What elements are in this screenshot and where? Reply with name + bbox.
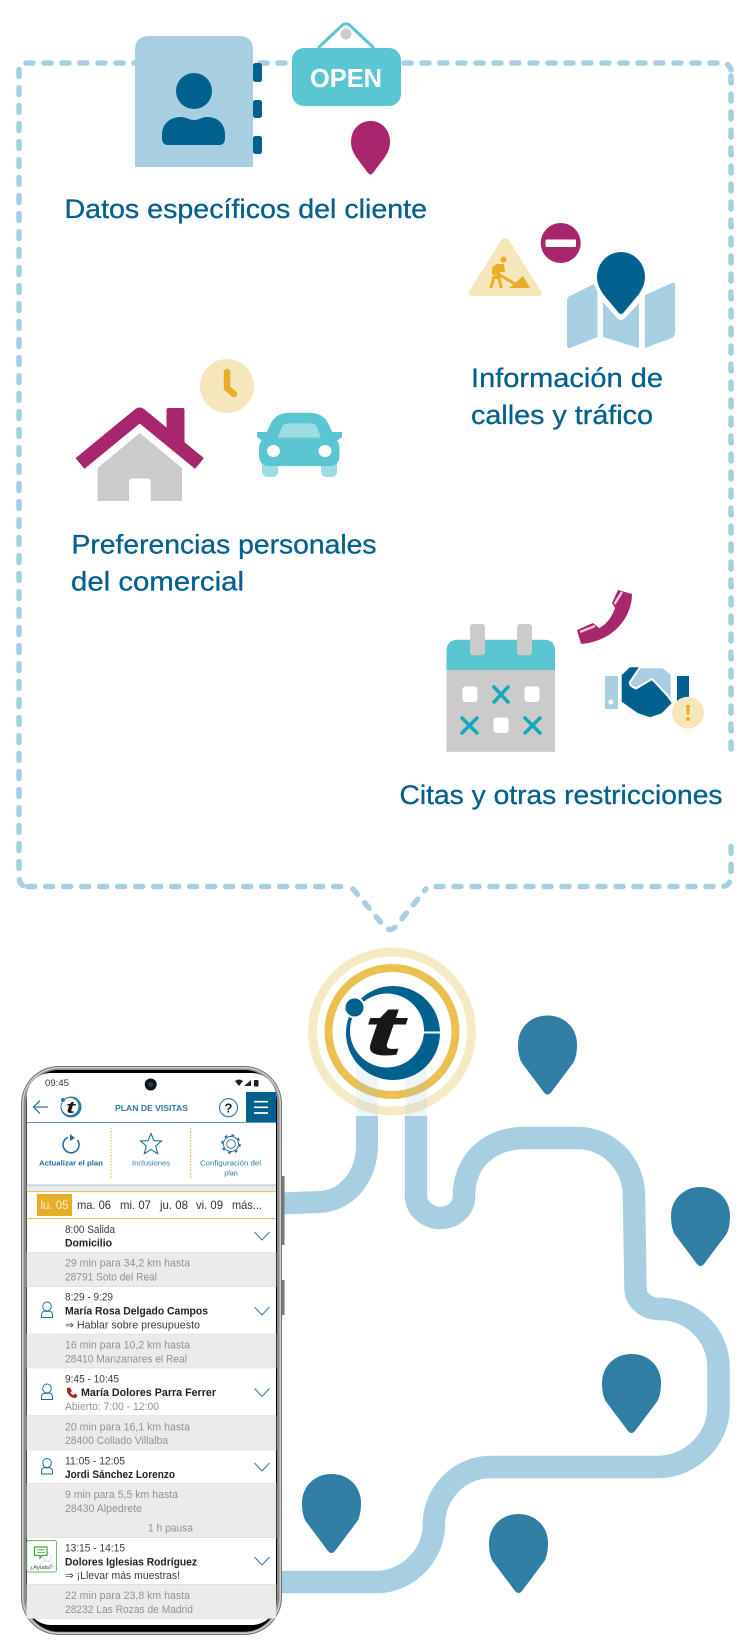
- toolbar: Actualizar el plan: [39, 1159, 103, 1168]
- heading: sales rep preferences: Preferencias personales: [72, 530, 376, 560]
- travel text 2: 28410 Manzanares el Real: [65, 1353, 187, 1365]
- heading: customer data: Datos específicos del cliente: [64, 194, 427, 224]
- toolbar: plan: [224, 1169, 238, 1178]
- travel text 2: [65, 1340, 191, 1365]
- row: departure: [65, 1224, 270, 1250]
- row: visit 2: [42, 1374, 270, 1413]
- travel text 3: [65, 1421, 191, 1447]
- row: visit 4: 13:15 - 14:15: [65, 1543, 125, 1555]
- row: departure: 8:00 Salida: [65, 1224, 116, 1236]
- row: visit 2: Abierto: 7:00 - 12:00: [65, 1401, 159, 1413]
- row: visit 1: 8:29 - 9:29: [65, 1292, 113, 1304]
- icon: open sign: OPEN: [310, 63, 382, 93]
- status bar: [45, 1078, 258, 1090]
- travel text 1: 28791 Soto del Real: [65, 1272, 157, 1284]
- pin 2: [671, 1187, 730, 1266]
- icon: clock: [200, 359, 254, 413]
- row: visit 2: María Dolores Parra Ferrer: [81, 1387, 217, 1399]
- travel text 5: 28232 Las Rozas de Madrid: [65, 1604, 193, 1616]
- icon: person: [42, 1384, 52, 1400]
- pin 3: [602, 1354, 661, 1433]
- row: visit 2: 9:45 - 10:45: [65, 1374, 119, 1386]
- icon: calendar: [446, 624, 555, 752]
- toolbar: Configuración del: [200, 1159, 261, 1168]
- row: visit 1: María Rosa Delgado Campos: [65, 1306, 208, 1318]
- travel text 3: 28400 Collado Villalba: [65, 1435, 169, 1447]
- travel text 4: 9 min para 5,5 km hasta: [65, 1489, 179, 1501]
- row: visit 3: 11:05 - 12:05: [65, 1455, 125, 1467]
- row: visit 3: Jordi Sánchez Lorenzo: [65, 1469, 175, 1481]
- date selector: ma. 06: [77, 1199, 111, 1212]
- icon: no entry sign: [541, 223, 581, 263]
- status bar: 09:45: [45, 1078, 69, 1089]
- icon: roadworks sign: [468, 238, 542, 296]
- icon: address book: [135, 36, 262, 167]
- date selector: vi. 09: [196, 1199, 223, 1212]
- logo: rings and emblem: t: [363, 993, 408, 1070]
- app header: PLAN DE VISITAS: [115, 1103, 188, 1113]
- heading: street and traffic information: Información de: [471, 363, 663, 393]
- pin 1: [518, 1016, 577, 1094]
- small logo: t: [66, 1097, 77, 1117]
- map pins: [302, 1016, 730, 1593]
- date selector: lu. 05: [40, 1199, 68, 1212]
- row: visit 4: ⇒ ¡Llevar más muestras!: [65, 1570, 180, 1582]
- icon: gear: [222, 1135, 240, 1153]
- travel text 4: 28430 Alpedrete: [65, 1503, 142, 1515]
- pin 4: [302, 1474, 361, 1553]
- app header: ?: [225, 1100, 233, 1116]
- route: road to phone top: [270, 1116, 367, 1204]
- icon: star: [140, 1134, 162, 1154]
- icon: car: [257, 413, 342, 477]
- icon: handshake with warning: [605, 667, 704, 729]
- heading: sales rep preferences: [71, 530, 376, 597]
- pin 5: [489, 1514, 548, 1593]
- icon: telephone: [577, 590, 632, 644]
- grey travel rows: [27, 1252, 276, 1618]
- travel text 2: 16 min para 10,2 km hasta: [65, 1340, 191, 1352]
- date selector: mi. 07: [120, 1199, 151, 1212]
- row: visit 1: [42, 1292, 270, 1332]
- travel text 1: [65, 1258, 191, 1284]
- row: visit 4: Dolores Iglesias Rodríguez: [65, 1556, 197, 1568]
- icon: refresh: [61, 1134, 80, 1155]
- phone mockup: [21, 1066, 284, 1635]
- travel text 3: 20 min para 16,1 km hasta: [65, 1421, 191, 1433]
- travel text 4: 1 h pausa: [148, 1522, 194, 1534]
- heading: street and traffic information: calles y tráfico: [471, 400, 653, 430]
- visit list: [27, 1224, 276, 1618]
- icon: house: [80, 408, 200, 501]
- date selector: más...: [232, 1199, 262, 1212]
- toolbar: Inclusiones: [132, 1159, 170, 1168]
- toolbar: [27, 1128, 276, 1192]
- help badge: [27, 1540, 56, 1572]
- app header: [27, 1092, 276, 1123]
- travel text 5: [65, 1590, 193, 1616]
- icon: magenta pin: [351, 121, 390, 174]
- travel text 4: [65, 1489, 194, 1534]
- heading: street and traffic information: [471, 363, 663, 430]
- phone frame: [21, 1066, 284, 1635]
- icon: person: [42, 1302, 52, 1318]
- row: departure: Domicilio: [65, 1238, 112, 1250]
- date selector: ju. 08: [159, 1199, 188, 1212]
- small logo: [60, 1096, 82, 1118]
- date selector: [27, 1191, 276, 1219]
- help badge: ¿Ayuda?: [30, 1565, 52, 1571]
- logo: rings and emblem: [312, 952, 472, 1116]
- row: visit 4: [27, 1540, 270, 1582]
- row: visit 1: ⇒ Hablar sobre presupuesto: [65, 1320, 200, 1332]
- travel text 5: 22 min para 23,8 km hasta: [65, 1590, 191, 1602]
- travel text 1: 29 min para 34,2 km hasta: [65, 1258, 191, 1270]
- icon: open sign: [292, 24, 401, 106]
- route: winding road: [270, 1116, 718, 1582]
- heading: appointments and restrictions: Citas y otras restricciones: [400, 780, 722, 810]
- heading: sales rep preferences: del comercial: [71, 567, 244, 597]
- row: visit 3: [42, 1455, 270, 1481]
- icon: map with pin: [567, 252, 675, 348]
- panel: dashed speech bubble: [19, 63, 731, 930]
- icon: person: [42, 1458, 52, 1474]
